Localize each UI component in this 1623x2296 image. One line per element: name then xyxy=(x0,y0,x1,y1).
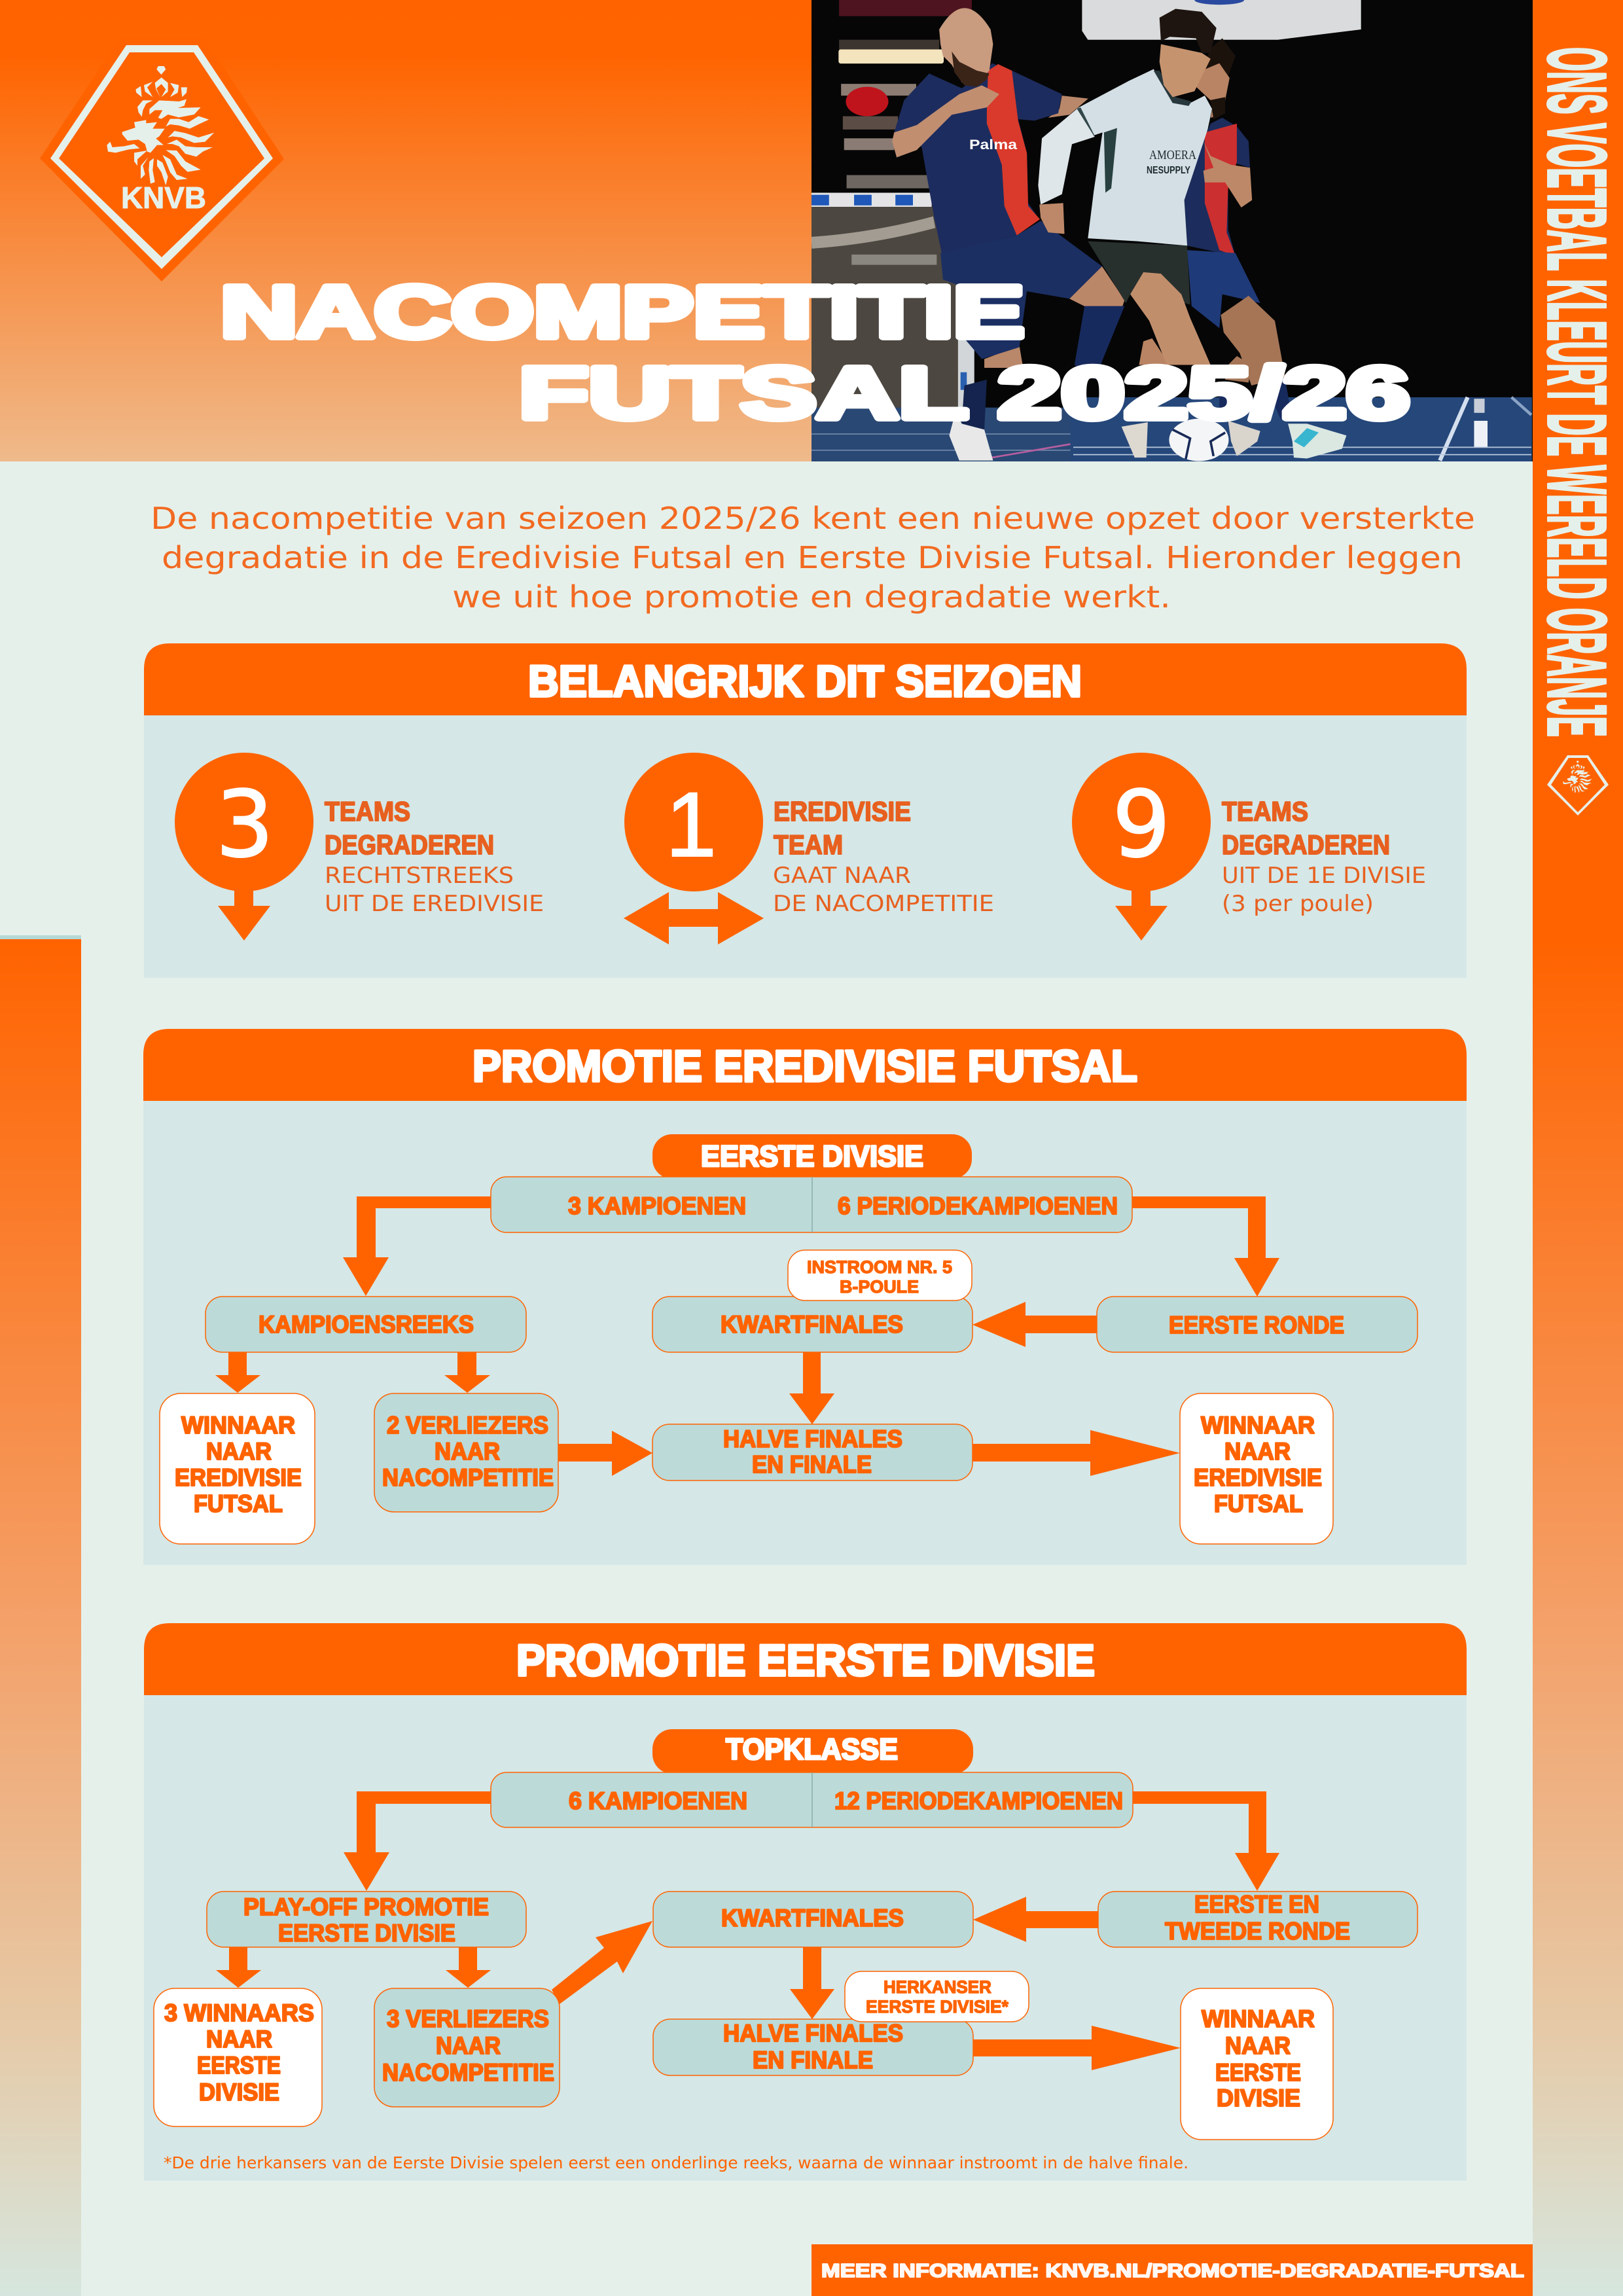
box: kampioenen en periodekampioenen: 6 PERIODEKAMPIOENEN xyxy=(838,1193,1118,1219)
back player xyxy=(1122,38,1346,461)
panel header xyxy=(144,643,1467,715)
box: 3 verliezers: NACOMPETITIE xyxy=(382,2059,554,2086)
box: 3 verliezers xyxy=(374,1988,560,2107)
box: play-off promotie: PLAY-OFF PROMOTIE xyxy=(243,1893,489,1920)
panel heading: PROMOTIE EERSTE DIVISIE xyxy=(516,1636,1095,1685)
stat: 3 teams degraderen: RECHTSTREEKS xyxy=(325,863,514,889)
box: winnaar naar eredivisie right: NAAR xyxy=(1224,1438,1291,1465)
arrow: kwartfinales to halve finales xyxy=(790,1947,834,2019)
box: winnaar naar eredivisie xyxy=(160,1393,315,1544)
box: eerste ronde: EERSTE RONDE xyxy=(1169,1312,1344,1338)
stat: 1 eredivisie team: GAAT NAAR xyxy=(773,863,911,889)
box: winnaar naar eerste divisie: DIVISIE xyxy=(1217,2085,1300,2111)
box: halve finales xyxy=(653,2019,973,2075)
box: winnaar naar eredivisie: FUTSAL xyxy=(194,1490,283,1517)
jersey sponsor text xyxy=(970,139,1196,173)
photo: futsal players xyxy=(812,0,1533,462)
box: eerste en tweede ronde xyxy=(1098,1891,1418,1947)
box: play-off promotie: EERSTE DIVISIE xyxy=(278,1920,455,1946)
arrow: to eerste ronde xyxy=(1132,1196,1279,1297)
stat: 1 eredivisie team: TEAM xyxy=(774,829,843,860)
box: eerste ronde xyxy=(1097,1297,1418,1352)
box: halve finales: HALVE FINALES xyxy=(723,1426,902,1452)
stat: 3 teams degraderen xyxy=(175,753,544,941)
pill: eerste divisie xyxy=(652,1134,972,1179)
box: kwartfinales: KWARTFINALES xyxy=(721,1311,903,1338)
stat: 3 teams degraderen: TEAMS xyxy=(325,796,410,827)
stat: 1 eredivisie team: DE NACOMPETITIE xyxy=(773,891,994,917)
box: 3 winnaars: EERSTE xyxy=(197,2052,281,2079)
icon: lion xyxy=(107,66,214,185)
stat: 9 teams degraderen xyxy=(1072,753,1426,941)
arrow: halve finales to winnaar xyxy=(973,2026,1181,2070)
stat: 1 eredivisie team xyxy=(624,753,994,944)
panel: promotie eerste divisie xyxy=(144,1623,1467,2181)
pill: topklasse: TOPKLASSE xyxy=(726,1732,898,1766)
box: winnaar naar eredivisie right: EREDIVISIE xyxy=(1194,1464,1322,1491)
callout: herkanser xyxy=(845,1971,1029,2022)
arrow: verliezers to halve finales xyxy=(558,1431,652,1476)
intro text: De nacompetitie van seizoen 2025/26 kent een nieuwe opzet door versterkte xyxy=(151,501,1475,536)
box: winnaar naar eredivisie right xyxy=(1180,1393,1333,1544)
box: 3 verliezers: NAAR xyxy=(436,2032,501,2059)
box: winnaar naar eerste divisie: EERSTE xyxy=(1215,2059,1301,2086)
intro text: degradatie in de Eredivisie Futsal en Eerste Divisie Futsal. Hieronder leggen xyxy=(162,540,1463,575)
text: ONS VOETBAL KLEURT DE WERELD ORANJE xyxy=(1531,47,1623,737)
box: kampioenen en periodekampioenen: 12 PERIODEKAMPIOENEN xyxy=(834,1787,1123,1814)
title xyxy=(221,271,1410,434)
box: 2 verliezers xyxy=(374,1393,558,1512)
arrow: ronde to kwartfinales xyxy=(973,1897,1098,1942)
box: eerste en tweede ronde: EERSTE EN xyxy=(1194,1891,1319,1918)
title: FUTSAL 2025/26 xyxy=(519,352,1410,434)
panel header xyxy=(143,1029,1467,1101)
arrow: to eerste en tweede ronde xyxy=(1133,1791,1279,1891)
box: halve finales: HALVE FINALES xyxy=(723,2020,903,2047)
arrow: to winnaars xyxy=(216,1947,261,1988)
box: 3 verliezers: 3 VERLIEZERS xyxy=(387,2005,549,2032)
arrow: to winnaar xyxy=(215,1352,260,1393)
left side bar xyxy=(0,935,81,2296)
stat: 9 teams degraderen: UIT DE 1E DIVISIE xyxy=(1222,863,1426,889)
callout: herkanser: EERSTE DIVISIE* xyxy=(866,1997,1008,2017)
jersey sponsor text: NESUPPLY xyxy=(1147,165,1190,176)
bald player xyxy=(892,8,1124,461)
panel: belangrijk dit seizoen xyxy=(144,643,1467,978)
callout: instroom: INSTROOM NR. 5 xyxy=(807,1257,952,1277)
arrow: to verliezers xyxy=(444,1352,490,1393)
panel heading: BELANGRIJK DIT SEIZOEN xyxy=(528,656,1082,706)
stat: 9 teams degraderen: (3 per poule) xyxy=(1222,891,1374,917)
box: 2 verliezers: 2 VERLIEZERS xyxy=(387,1412,548,1439)
box: kwartfinales xyxy=(652,1297,972,1352)
box: halve finales xyxy=(652,1424,972,1480)
small KNVB logo on side bar xyxy=(1547,755,1609,816)
box: winnaar naar eredivisie: WINNAAR xyxy=(181,1412,295,1439)
background hall details xyxy=(812,0,1071,461)
intro text: we uit hoe promotie en degradatie werkt. xyxy=(452,579,1171,615)
callout: instroom: B-POULE xyxy=(840,1277,919,1297)
box: kwartfinales xyxy=(653,1892,973,1947)
logo wordmark: KNVB xyxy=(121,181,206,215)
stat: 1 eredivisie team: 1 xyxy=(666,773,717,876)
box: 2 verliezers: NACOMPETITIE xyxy=(382,1464,554,1491)
box: halve finales: EN FINALE xyxy=(752,1451,872,1478)
arrow: eerste ronde to kwartfinales xyxy=(972,1302,1097,1347)
KNVB logo xyxy=(40,38,284,281)
box: play-off promotie xyxy=(207,1892,526,1947)
box: eerste en tweede ronde: TWEEDE RONDE xyxy=(1165,1918,1350,1945)
arrow: kwartfinales to halve finales xyxy=(789,1352,834,1424)
arrow: to kampioensreeks xyxy=(343,1196,491,1296)
left gradient header block xyxy=(0,0,812,461)
box: winnaar naar eredivisie: NAAR xyxy=(206,1438,272,1465)
box: 3 winnaars: NAAR xyxy=(206,2026,272,2053)
arrow: halve finales to winnaar xyxy=(972,1430,1180,1476)
footer bar: meer informatie xyxy=(812,2244,1533,2296)
box: winnaar naar eredivisie right: FUTSAL xyxy=(1214,1490,1303,1517)
footer bar: meer informatie: MEER INFORMATIE: KNVB.NL/PROMOTIE-DEGRADATIE-FUTSAL xyxy=(821,2261,1524,2282)
box: halve finales: EN FINALE xyxy=(753,2047,873,2073)
stat: 3 teams degraderen: 3 xyxy=(215,772,274,878)
box: kampioensreeks xyxy=(205,1297,526,1352)
box: kampioenen en periodekampioenen xyxy=(491,1772,1133,1827)
stat: 9 teams degraderen: 9 xyxy=(1112,772,1171,878)
callout: herkanser: HERKANSER xyxy=(883,1977,991,1997)
footnote: *De drie herkansers van de Eerste Divisie spelen eerst een onderlinge reeks, waarna de winnaar instroomt in de halve finale. xyxy=(164,2153,1188,2172)
stat: 3 teams degraderen: UIT DE EREDIVISIE xyxy=(325,891,544,917)
box: kwartfinales: KWARTFINALES xyxy=(721,1905,904,1931)
box: 2 verliezers: NAAR xyxy=(435,1438,500,1465)
panel header xyxy=(144,1623,1467,1695)
stat: 3 teams degraderen: DEGRADEREN xyxy=(325,829,494,860)
box: winnaar naar eerste divisie: WINNAAR xyxy=(1202,2005,1315,2032)
box: kampioensreeks: KAMPIOENSREEKS xyxy=(259,1311,474,1338)
arrow: verliezers to kwartfinales xyxy=(552,1921,652,2004)
box: 3 winnaars xyxy=(154,1988,322,2126)
panel heading: PROMOTIE EREDIVISIE FUTSAL xyxy=(473,1041,1137,1091)
jersey sponsor text: Palma xyxy=(969,137,1017,152)
box: winnaar naar eerste divisie: NAAR xyxy=(1225,2032,1291,2059)
title: NACOMPETITIE xyxy=(221,271,1024,353)
pill: eerste divisie: EERSTE DIVISIE xyxy=(701,1139,923,1173)
box: 3 winnaars: 3 WINNAARS xyxy=(164,2000,314,2026)
stat: 1 eredivisie team: EREDIVISIE xyxy=(774,796,911,827)
callout: instroom xyxy=(788,1250,972,1300)
stat: 9 teams degraderen: TEAMS xyxy=(1222,796,1308,827)
pill: topklasse xyxy=(652,1729,973,1774)
box: kampioenen en periodekampioenen: 3 KAMPIOENEN xyxy=(568,1193,746,1219)
box: 3 winnaars: DIVISIE xyxy=(199,2079,279,2106)
box: kampioenen en periodekampioenen: 6 KAMPIOENEN xyxy=(569,1787,747,1814)
arrow: to verliezers xyxy=(446,1947,491,1988)
white kit player xyxy=(1073,9,1217,365)
box: winnaar naar eredivisie right: WINNAAR xyxy=(1201,1412,1315,1439)
box: winnaar naar eerste divisie xyxy=(1181,1988,1333,2140)
intro text xyxy=(151,501,1475,615)
right side bar xyxy=(1533,0,1623,2296)
panel: promotie eredivisie futsal xyxy=(143,1029,1467,1565)
stat: 9 teams degraderen: DEGRADEREN xyxy=(1222,829,1390,860)
jersey sponsor text: AMOERA xyxy=(1149,148,1196,162)
arrow: to play-off xyxy=(344,1791,491,1891)
box: kampioenen en periodekampioenen xyxy=(491,1177,1132,1232)
box: winnaar naar eredivisie: EREDIVISIE xyxy=(175,1464,302,1491)
